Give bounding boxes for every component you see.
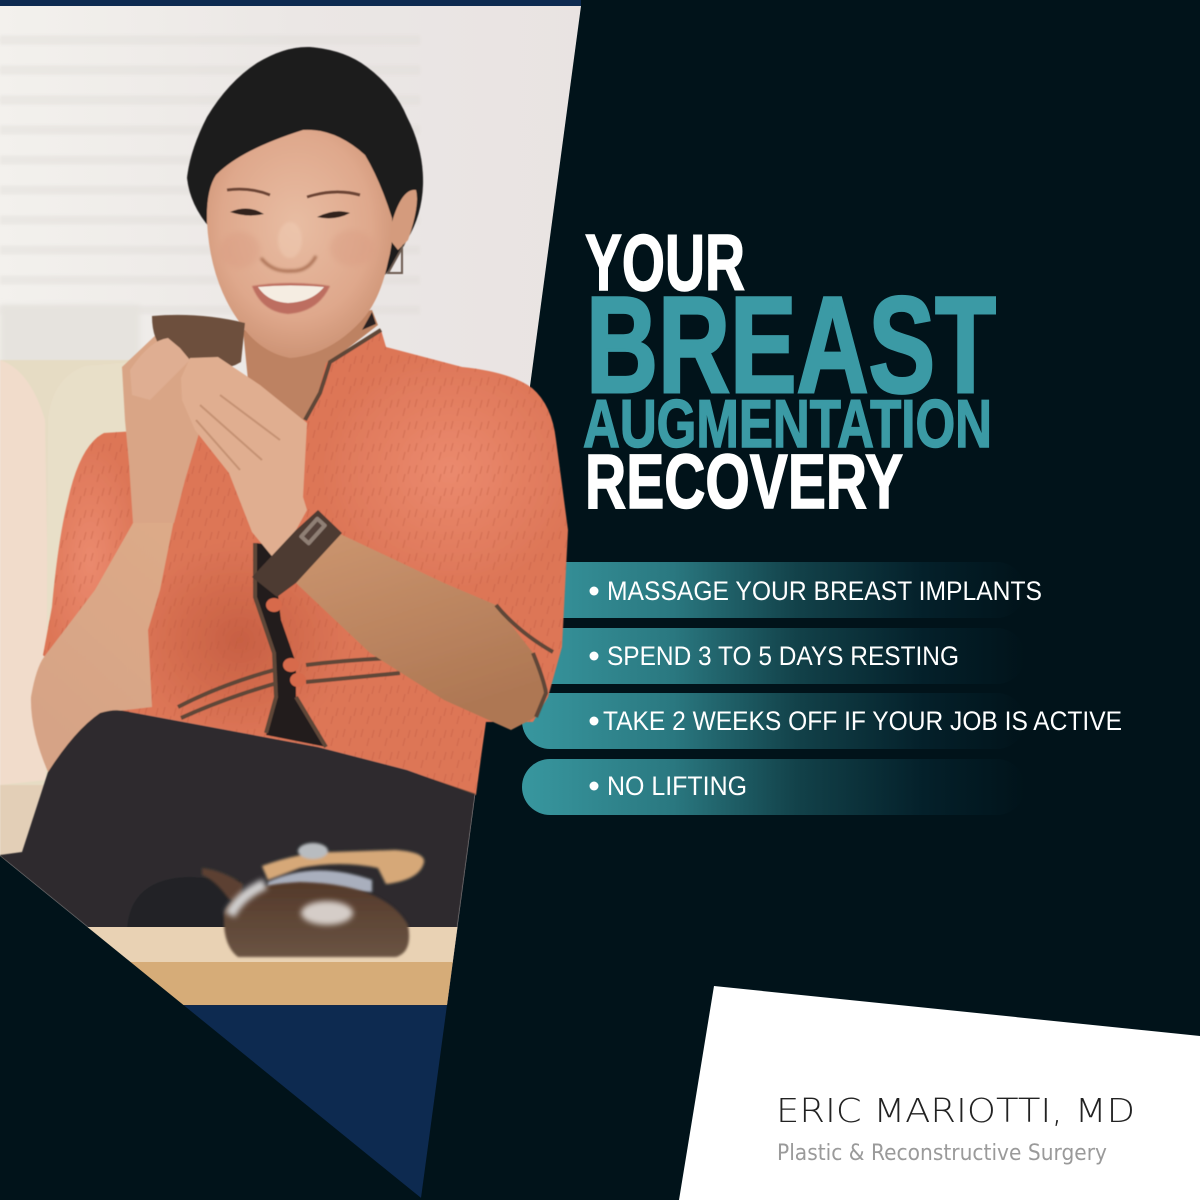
cheek shading — [220, 232, 260, 268]
recovery tips list: MASSAGE YOUR BREAST IMPLANTS — [607, 576, 1042, 606]
blouse trim — [178, 330, 400, 747]
ear — [390, 190, 417, 250]
logo panel — [679, 986, 1200, 1200]
left arm — [31, 520, 174, 772]
right hand — [181, 357, 307, 560]
blouse hem — [407, 772, 475, 795]
watch — [252, 510, 342, 597]
fingers on cup — [130, 338, 190, 400]
cup — [152, 315, 245, 368]
photo: room background — [0, 6, 590, 1006]
logo panel: Plastic & Reconstructive Surgery — [777, 1141, 1107, 1166]
earring — [388, 248, 402, 273]
title: RECOVERY — [585, 439, 903, 525]
navy panel under photo — [180, 1005, 447, 1198]
eyes and brows — [227, 189, 360, 218]
title: BREAST — [586, 269, 996, 422]
table — [85, 882, 465, 1005]
smile — [252, 283, 330, 314]
hair — [187, 47, 423, 275]
face — [207, 130, 392, 358]
title: YOUR — [585, 218, 745, 307]
pants — [0, 710, 476, 1005]
nose — [261, 222, 316, 271]
recovery tips list: TAKE 2 WEEKS OFF IF YOUR JOB IS ACTIVE — [603, 706, 1122, 736]
pants fold — [128, 878, 229, 927]
inner top — [255, 543, 326, 747]
recovery tips list: NO LIFTING — [607, 771, 747, 801]
sleeve cuff trim — [496, 605, 553, 717]
neck — [243, 310, 378, 425]
dark corner triangle — [0, 856, 421, 1200]
recovery tips list — [590, 576, 1122, 801]
title — [583, 218, 996, 525]
top navy stripe — [0, 0, 581, 6]
teapot top — [202, 843, 424, 906]
knot buttons — [266, 598, 306, 687]
left hand — [122, 332, 205, 523]
finger lines — [196, 395, 280, 470]
teapot body — [224, 882, 409, 957]
blouse — [30, 320, 580, 800]
title: AUGMENTATION — [583, 386, 992, 462]
list bars — [522, 562, 1025, 815]
photo: woman — [0, 47, 580, 1005]
right forearm — [296, 533, 548, 730]
recovery tips list: SPEND 3 TO 5 DAYS RESTING — [607, 641, 959, 671]
sofa — [0, 360, 140, 860]
logo panel: ERIC MARIOTTI, MD — [776, 1091, 1135, 1130]
